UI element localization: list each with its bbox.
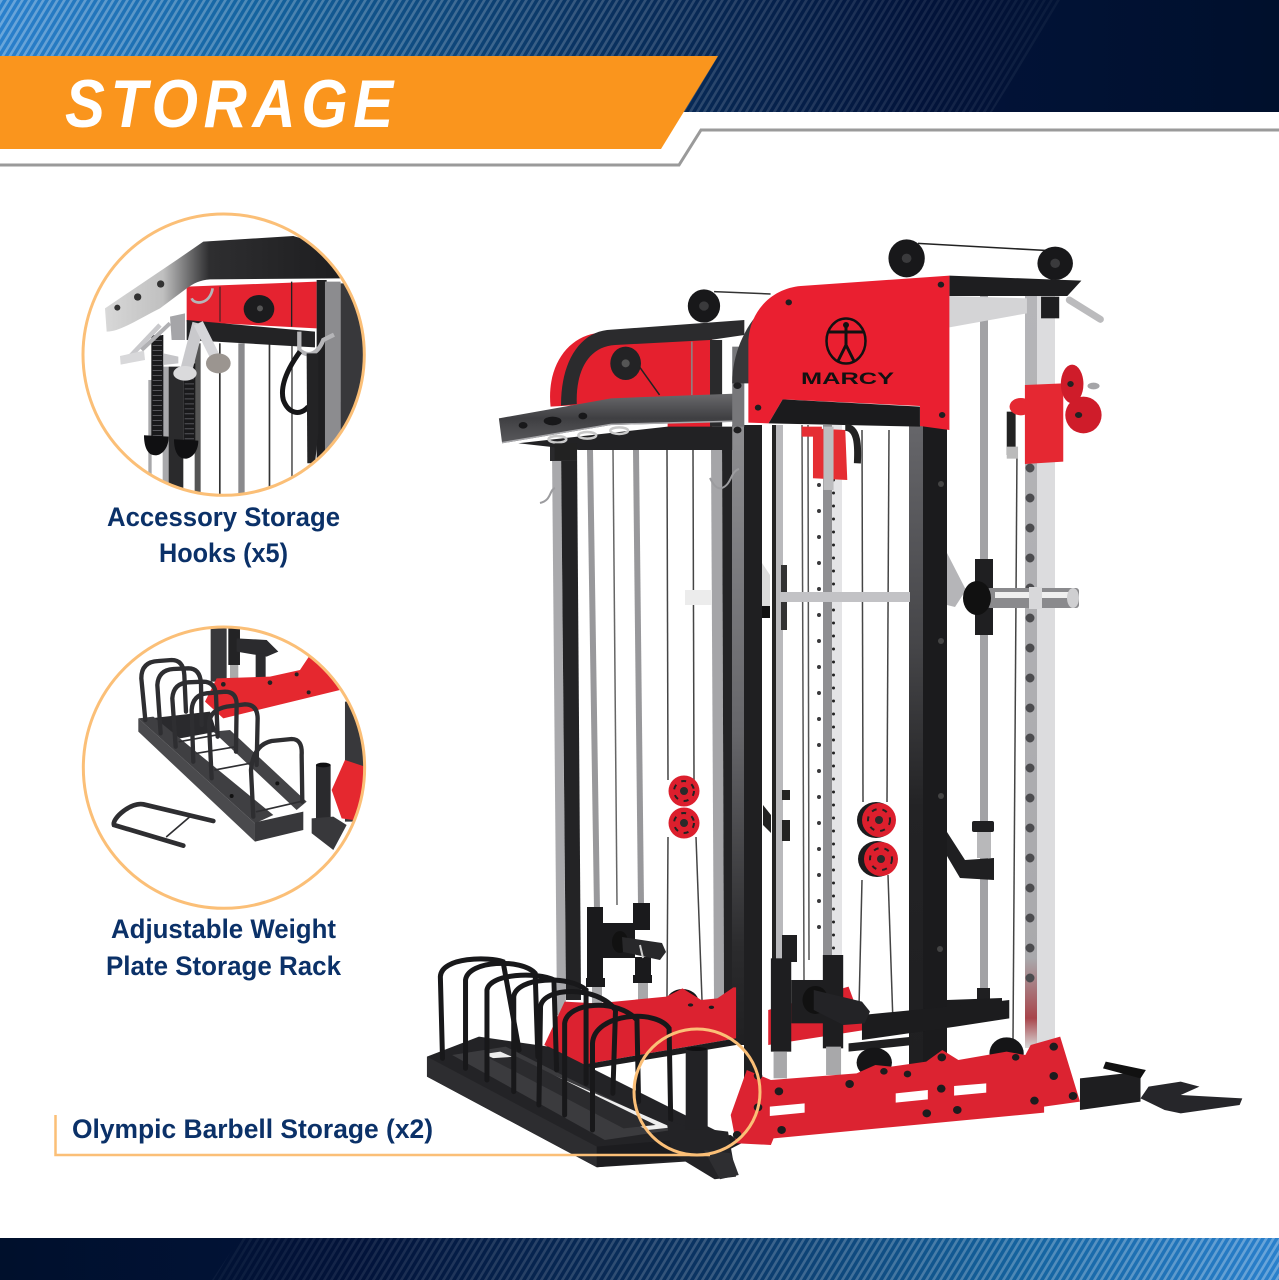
silver side of main frame xyxy=(732,347,744,427)
red main panel xyxy=(748,276,949,430)
header white step and grey rule xyxy=(0,112,1279,165)
inset heading: plate rack: Adjustable Weight xyxy=(111,914,336,944)
storage rack base xyxy=(427,1037,741,1167)
inset: weight plate rack xyxy=(80,625,373,918)
black cross bar xyxy=(862,1000,1009,1040)
storage hooks xyxy=(549,427,628,443)
rope handle xyxy=(144,335,198,459)
hook bracket xyxy=(555,443,577,460)
main pulleys xyxy=(888,239,1073,280)
rear cable and pulley xyxy=(688,289,771,323)
title banner xyxy=(0,56,718,149)
machine: top section xyxy=(499,239,1102,490)
title: STORAGE xyxy=(65,65,395,142)
MARCY logo: MARCY xyxy=(801,369,895,388)
rear beam xyxy=(518,427,732,450)
machine: barbell xyxy=(685,553,1079,635)
inset heading: plate rack: Plate Storage Rack xyxy=(106,951,342,981)
rear uprights top xyxy=(710,340,722,427)
machine: rear lower sleeve bracket xyxy=(586,903,666,1009)
black beam xyxy=(187,320,315,347)
rear black arc frame xyxy=(561,320,744,406)
barbell post and foot xyxy=(666,1047,739,1179)
hook and strap xyxy=(282,332,334,463)
right top beam xyxy=(949,276,1081,296)
barbell callout circle xyxy=(634,1029,760,1155)
inset heading: accessory storage hooks: Accessory Storage xyxy=(107,502,340,532)
handle right top xyxy=(1069,300,1100,319)
black notch xyxy=(769,399,920,427)
inset heading: plate rack xyxy=(106,914,342,981)
bolts xyxy=(114,280,164,311)
inset: accessory storage hooks xyxy=(80,210,373,503)
storage hooks on uprights xyxy=(540,469,739,503)
callout line xyxy=(56,1115,710,1155)
inset heading: accessory storage hooks: Hooks (x5) xyxy=(159,538,288,568)
plate hoops xyxy=(141,660,302,817)
right foot beam and pad xyxy=(1080,1062,1242,1113)
front sleeve bracket xyxy=(771,955,1024,1078)
machine: red pulleys and lower right bracket xyxy=(668,776,1002,1022)
rear pulley xyxy=(610,342,692,395)
callout label: Olympic Barbell Storage (x2) xyxy=(72,1114,433,1144)
rear red panel xyxy=(550,333,712,427)
circle outline xyxy=(83,214,364,495)
red panel xyxy=(187,282,317,328)
machine: base section xyxy=(427,955,1242,1179)
barbell post xyxy=(312,763,347,850)
pulley xyxy=(244,295,274,323)
circle outline xyxy=(83,627,365,908)
front red base plate xyxy=(731,1037,1080,1145)
loose hoop xyxy=(114,804,213,846)
small handle xyxy=(120,313,185,365)
right column xyxy=(317,280,365,463)
rear red base plate xyxy=(544,987,865,1070)
background machine parts xyxy=(205,628,365,822)
MARCY logo xyxy=(801,318,895,388)
right red carriage xyxy=(1007,365,1102,464)
footer band xyxy=(0,1238,1279,1280)
hoop dividers xyxy=(440,959,671,1130)
V handle xyxy=(173,288,231,381)
grey bar xyxy=(499,393,742,443)
pulleys behind rear plate xyxy=(666,989,699,1014)
header band xyxy=(0,0,1279,112)
top arm xyxy=(105,236,340,332)
machine: frame uprights xyxy=(550,296,1055,1080)
rack base xyxy=(150,712,217,738)
main dark arc xyxy=(732,287,813,383)
inset heading: accessory storage hooks xyxy=(107,502,340,568)
middle red carriage xyxy=(802,427,858,490)
uprights and cables xyxy=(148,343,293,500)
